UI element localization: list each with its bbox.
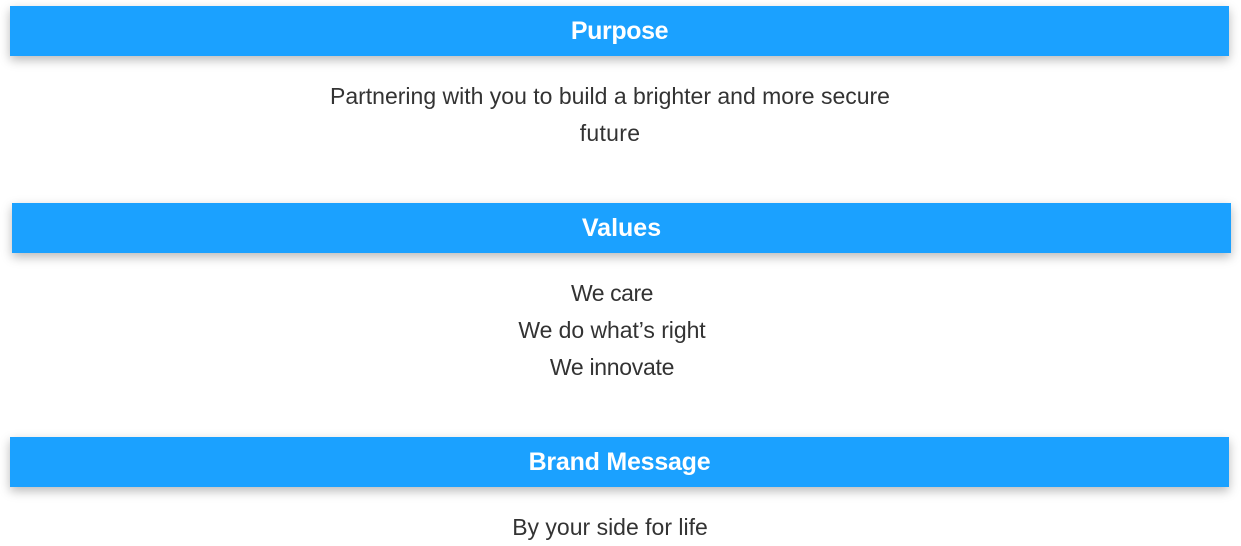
text block: Values list: We care [571, 280, 653, 306]
text block: Purpose statement: Partnering with you to build a brighter and more secure [330, 83, 890, 109]
text block: Purpose statement [330, 83, 890, 146]
text block: Values list: We do what’s right [518, 317, 706, 343]
panel: Values heading bar: Values [582, 214, 661, 242]
text block: Brand message statement: By your side for life [512, 514, 708, 540]
panel: Purpose heading bar: Purpose [571, 17, 668, 45]
panel: Purpose heading bar [10, 6, 1229, 56]
panel: Values heading bar [12, 203, 1231, 253]
panel: Brand Message heading bar: Brand Message [529, 448, 710, 476]
text block: Values list: We innovate [550, 354, 674, 380]
text block: Values list [518, 280, 706, 380]
panel: Brand Message heading bar [10, 437, 1229, 487]
text block: Purpose statement: future [580, 120, 640, 146]
